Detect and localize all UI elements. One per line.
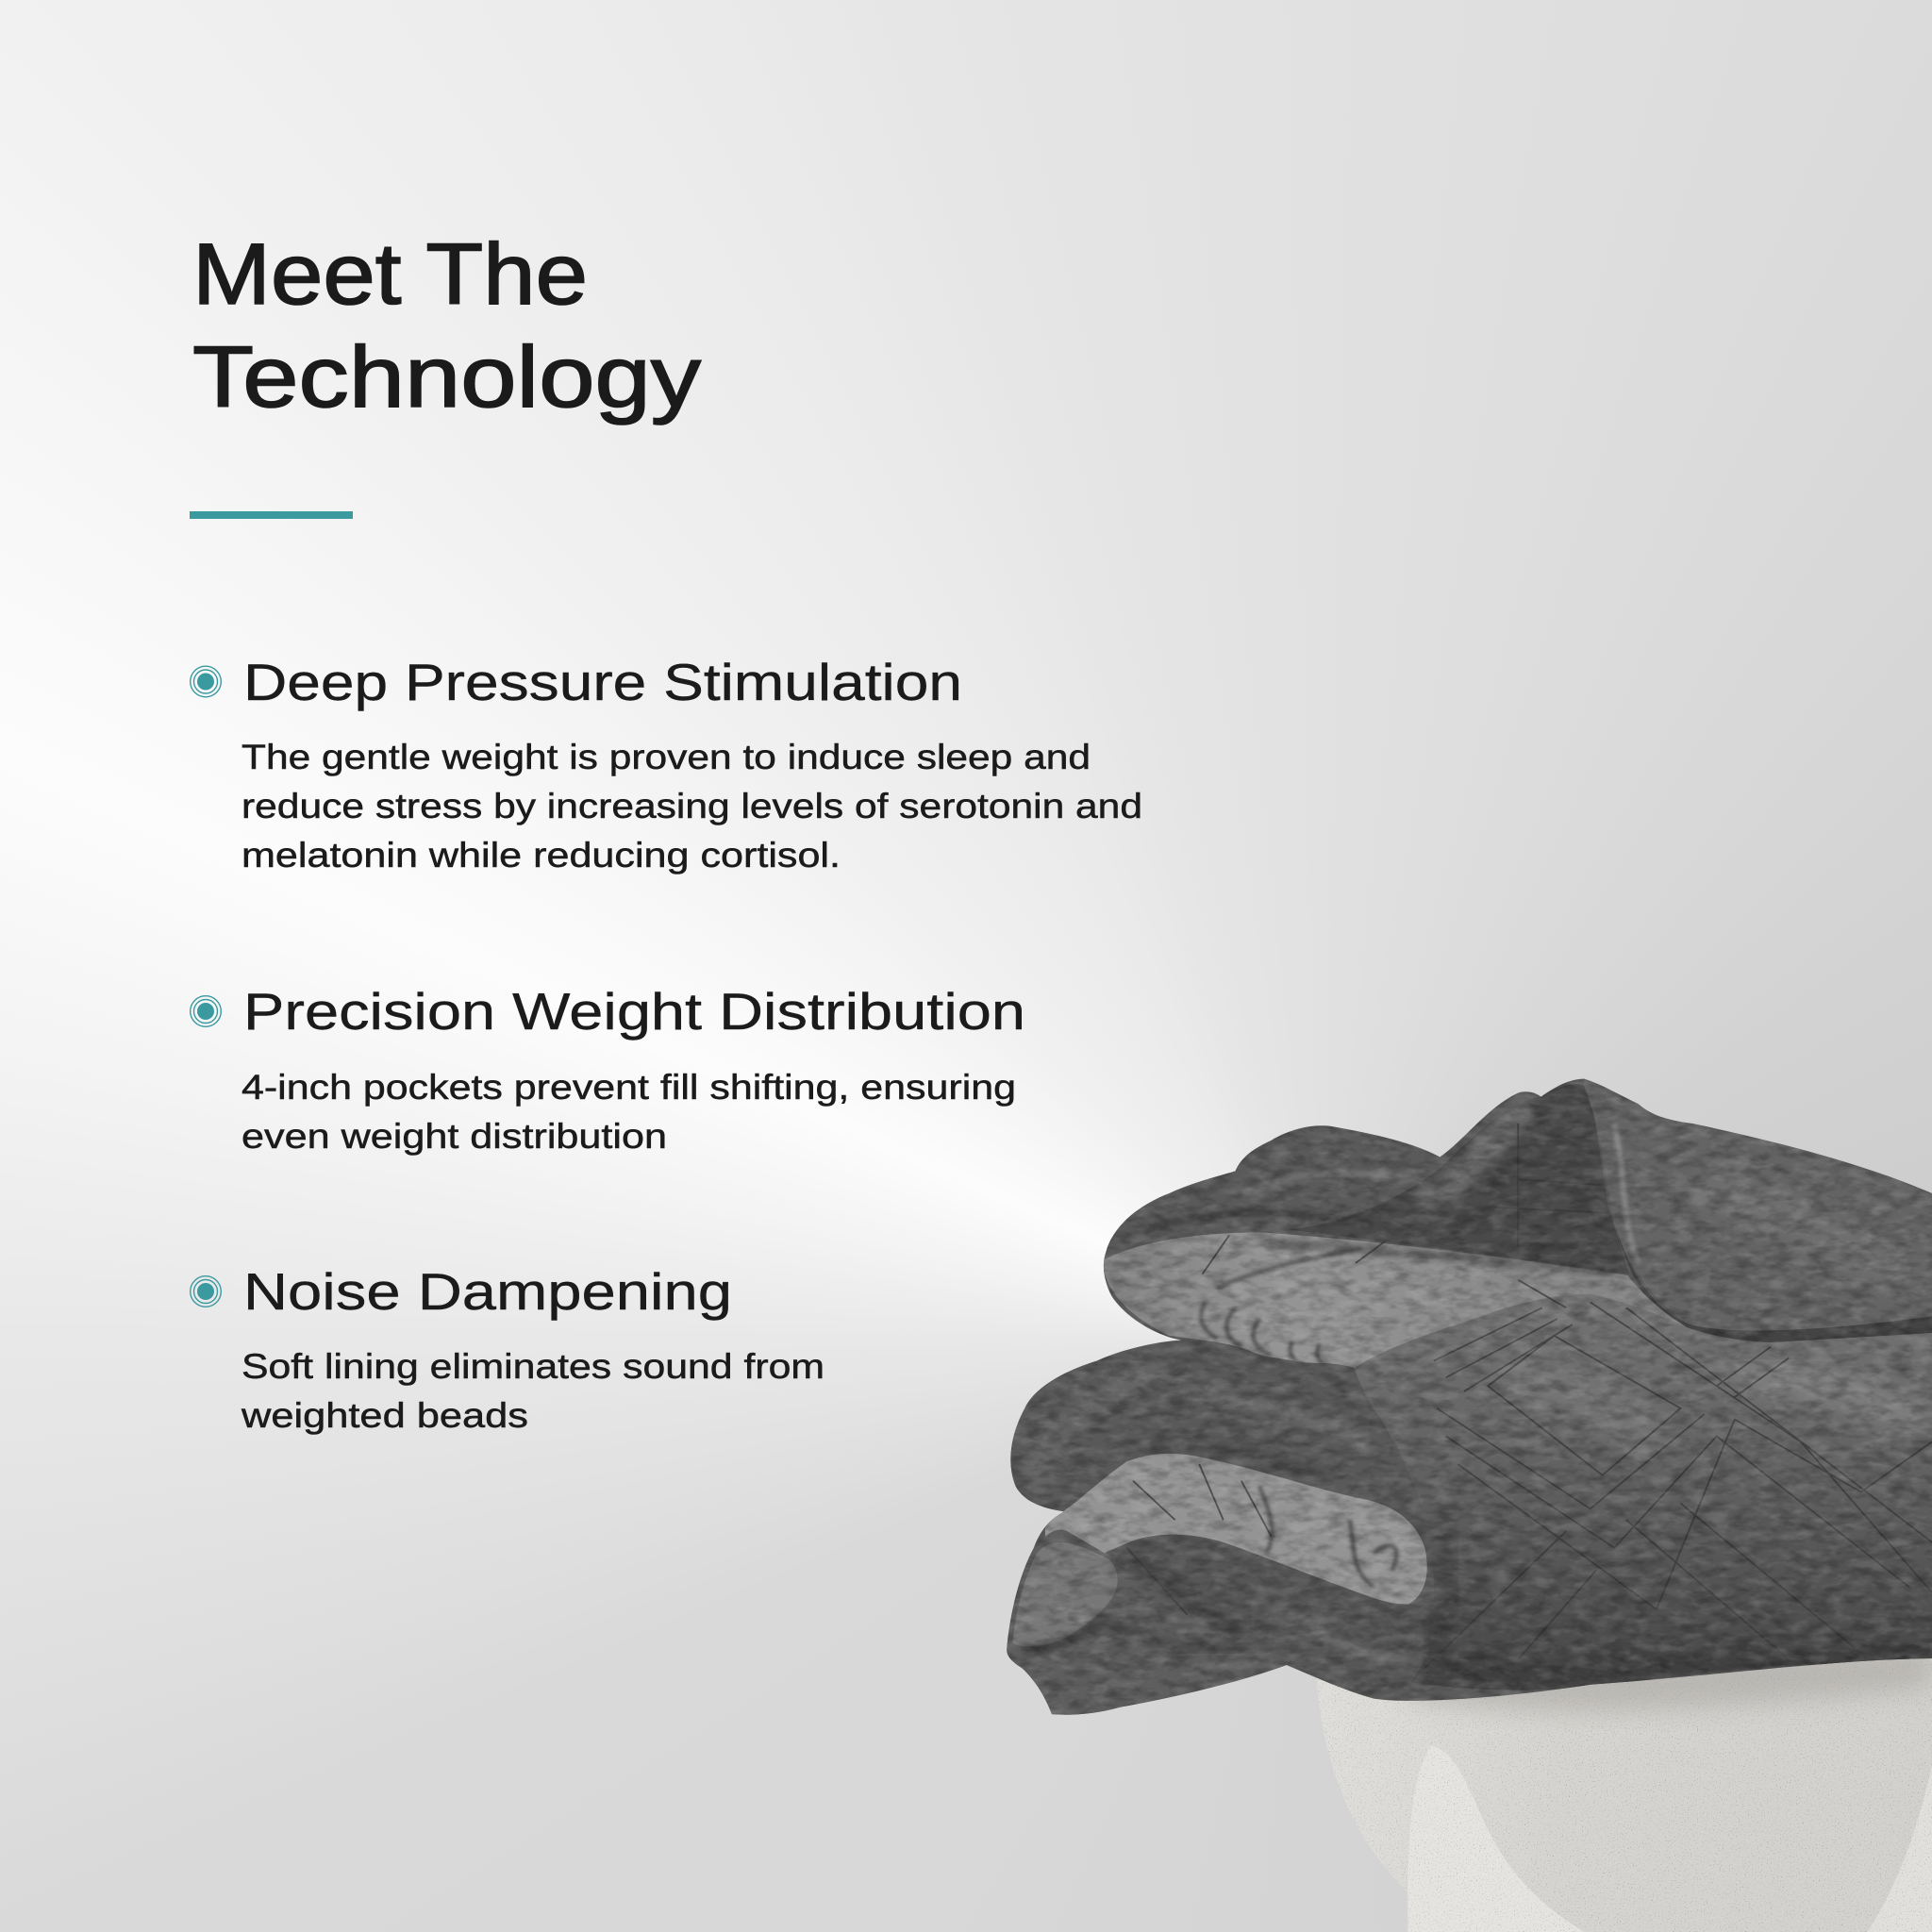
title accent rule bbox=[190, 511, 353, 519]
quilt stitching bbox=[1127, 1124, 1932, 1671]
description: Soft lining eliminates sound from bbox=[242, 1347, 824, 1386]
icon: teal target bullet bbox=[191, 666, 221, 697]
main canvas bbox=[190, 240, 1932, 1932]
icon: teal target bullet bbox=[191, 1276, 221, 1307]
stool left leg bbox=[1407, 1746, 1584, 1932]
heading: Noise Dampening bbox=[243, 1262, 732, 1321]
title: Meet The bbox=[192, 226, 588, 323]
folded blanket bbox=[1007, 1079, 1932, 1715]
concrete stool bbox=[1317, 1648, 1932, 1932]
inner light fold bbox=[1045, 1454, 1427, 1607]
blanket shadow on stool bbox=[1409, 1648, 1932, 1710]
description: 4-inch pockets prevent fill shifting, ensuring bbox=[242, 1068, 1016, 1107]
inner dark fold bbox=[1290, 1084, 1629, 1274]
description bbox=[242, 1068, 1016, 1156]
shading folds bbox=[1031, 1369, 1163, 1481]
lower left tuck bbox=[1007, 1529, 1289, 1715]
feature: Deep Pressure Stimulation bbox=[191, 653, 1142, 874]
feature: Precision Weight Distribution bbox=[191, 982, 1025, 1156]
middle light layer bbox=[1103, 1232, 1710, 1368]
stool right leg bbox=[1867, 1766, 1932, 1932]
fold highlight bbox=[1422, 1104, 1530, 1203]
scalloped fold creases bbox=[1201, 1249, 1396, 1587]
upper left roll bbox=[1010, 1347, 1407, 1511]
description: melatonin while reducing cortisol. bbox=[242, 836, 841, 874]
feature: Noise Dampening bbox=[191, 1262, 824, 1435]
lower roll band bbox=[1123, 1534, 1423, 1682]
description: even weight distribution bbox=[242, 1117, 667, 1156]
description bbox=[241, 1347, 824, 1435]
main quilted face bbox=[1355, 1294, 1932, 1690]
title: Technology bbox=[192, 329, 701, 425]
description: reduce stress by increasing levels of serotonin and bbox=[242, 787, 1142, 825]
concrete stool and folded weighted blanket bbox=[1007, 1079, 1932, 1932]
top fold bbox=[1108, 1126, 1375, 1248]
lower left light facet bbox=[1013, 1542, 1118, 1646]
description: The gentle weight is proven to induce sleep and bbox=[242, 738, 1091, 776]
icon: teal target bullet bbox=[191, 996, 221, 1026]
heading: Deep Pressure Stimulation bbox=[243, 653, 962, 711]
heading: Precision Weight Distribution bbox=[243, 982, 1025, 1041]
description bbox=[242, 738, 1142, 874]
description: weighted beads bbox=[241, 1396, 528, 1435]
right flap bbox=[1584, 1079, 1932, 1339]
title bbox=[192, 226, 701, 425]
